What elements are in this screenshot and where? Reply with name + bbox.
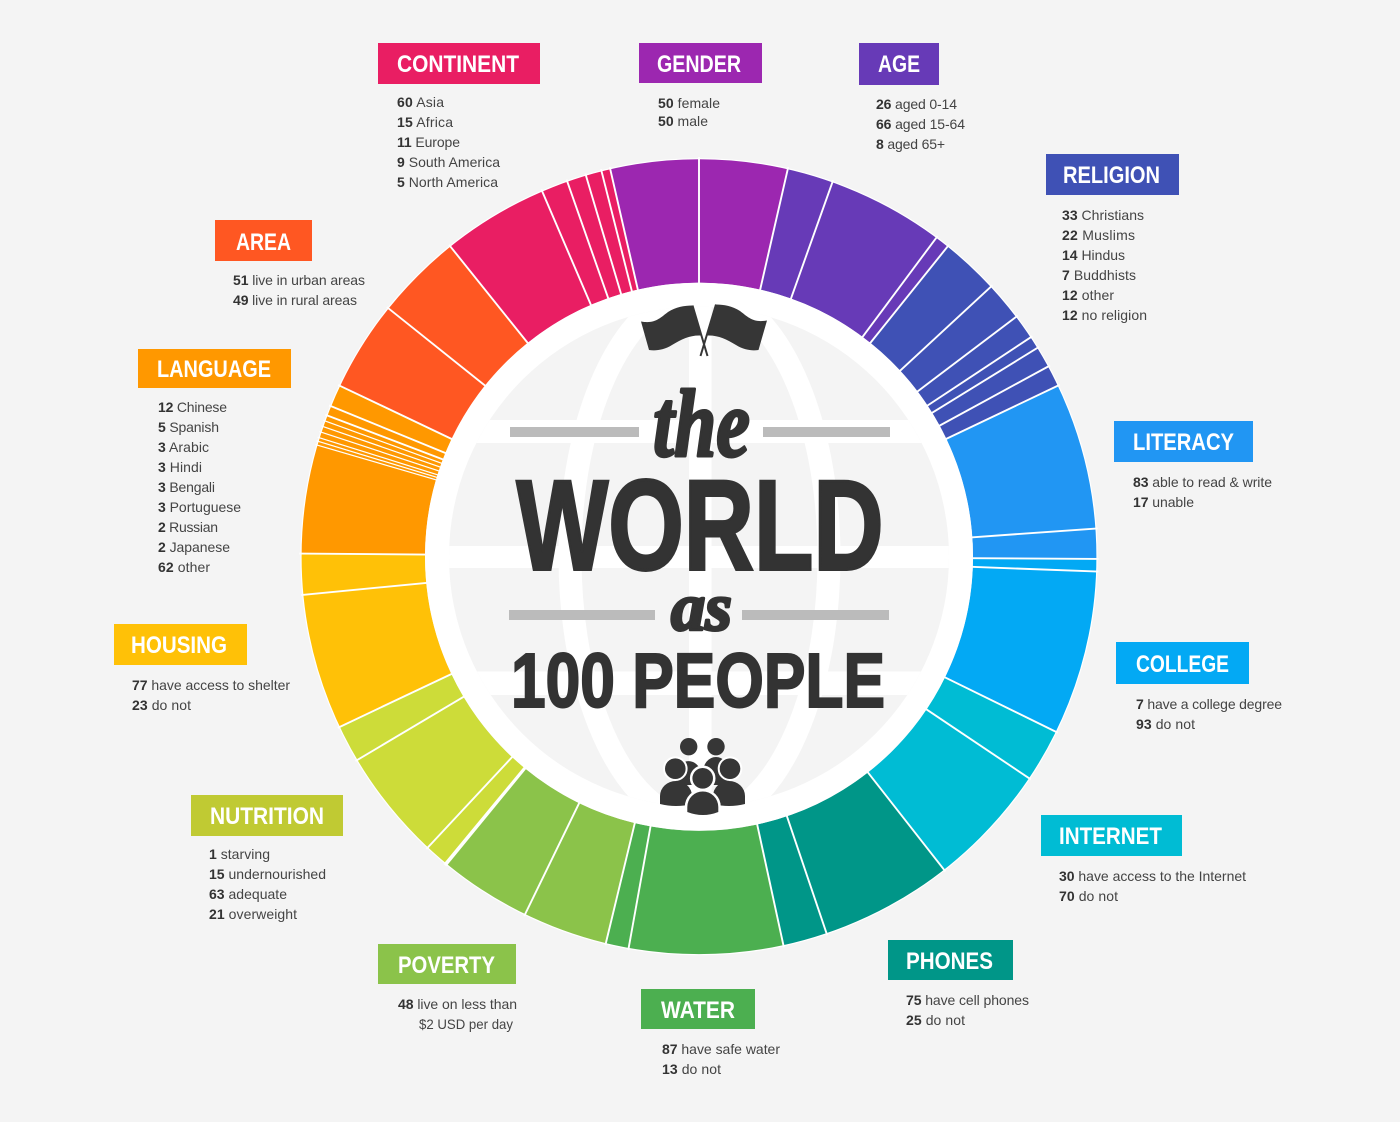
bar: right of as [742, 610, 889, 620]
list: language: 5 Spanish [158, 419, 219, 435]
list: language: 2 Russian [158, 519, 218, 535]
panel: college [1116, 642, 1282, 732]
list: religion: 14 Hindus [1062, 247, 1125, 263]
panel: gender [639, 43, 762, 129]
list: internet: 30 have access to the Internet [1059, 868, 1246, 884]
wedge: internet [868, 677, 1056, 870]
heading: water: WATER [661, 997, 735, 1024]
list: water [662, 1041, 780, 1077]
list: gender: 50 male [658, 113, 708, 129]
heading: area: AREA [236, 229, 291, 256]
wedge: continent [450, 169, 638, 343]
list: language: 3 Portuguese [158, 499, 241, 515]
list: poverty [398, 996, 517, 1032]
wedge: language [301, 386, 452, 555]
list: poverty: $2 USD per day [419, 1016, 513, 1032]
list: language: 3 Hindi [158, 459, 202, 475]
list: continent: 11 Europe [397, 134, 460, 150]
heading: phones: PHONES [906, 948, 993, 975]
panel: religion [1046, 154, 1179, 323]
bar: left of as [509, 610, 655, 620]
list: area [233, 272, 365, 308]
list: religion [1062, 207, 1147, 323]
panel: water [641, 989, 780, 1077]
wedge: age [760, 169, 948, 343]
heading: religion: RELIGION [1063, 162, 1160, 189]
panel: nutrition [191, 795, 343, 922]
list: nutrition: 21 overweight [209, 906, 297, 922]
list: nutrition [209, 846, 326, 922]
list: age: 26 aged 0-14 [876, 96, 957, 112]
list: area: 51 live in urban areas [233, 272, 365, 288]
list: housing: 77 have access to shelter [132, 677, 290, 693]
list: housing: 23 do not [132, 697, 191, 713]
heading: college [1116, 642, 1249, 684]
panel: age [859, 43, 965, 152]
panel: continent [378, 43, 540, 190]
heading: language: LANGUAGE [157, 356, 271, 383]
list: gender [658, 95, 720, 129]
panel: phones [888, 940, 1029, 1028]
list: nutrition: 1 starving [209, 846, 270, 862]
list: religion: 12 no religion [1062, 307, 1147, 323]
wedge: literacy [946, 385, 1097, 559]
heading: gender: GENDER [657, 51, 741, 78]
list: age [876, 96, 965, 152]
heading: internet: INTERNET [1059, 823, 1162, 850]
list: language: 2 Japanese [158, 539, 230, 555]
heading: language [138, 349, 291, 388]
heading: religion [1046, 154, 1179, 195]
list: internet: 70 do not [1059, 888, 1118, 904]
title word: as: as [671, 569, 732, 645]
wedge: gender [610, 159, 788, 290]
list: phones [906, 992, 1029, 1028]
heading: internet [1041, 815, 1182, 856]
heading: area [215, 220, 312, 261]
list: continent: 60 Asia [397, 94, 444, 110]
list: religion: 33 Christians [1062, 207, 1144, 223]
list: poverty: 48 live on less than [398, 996, 517, 1012]
panel: housing [114, 624, 290, 713]
list: continent: 9 South America [397, 154, 500, 170]
list: housing [132, 677, 290, 713]
list: phones: 25 do not [906, 1012, 965, 1028]
title [509, 304, 890, 815]
list: language: 12 Chinese [158, 399, 227, 415]
globe background [425, 283, 973, 831]
wedge: water [606, 823, 784, 955]
list: religion: 22 Muslims [1062, 227, 1135, 243]
list: phones: 75 have cell phones [906, 992, 1029, 1008]
list: literacy [1133, 474, 1272, 510]
title word: WORLD: WORLD [516, 454, 884, 598]
panel: internet [1041, 815, 1246, 904]
list: language: 3 Bengali [158, 479, 215, 495]
title words: 100 PEOPLE: 100 PEOPLE [511, 638, 885, 724]
list: continent: 5 North America [397, 174, 498, 190]
list: college [1136, 696, 1282, 732]
list: water: 13 do not [662, 1061, 721, 1077]
list: literacy: 83 able to read & write [1133, 474, 1272, 490]
panel: literacy [1114, 421, 1272, 510]
list: language: 3 Arabic [158, 439, 209, 455]
bar: left of the [510, 427, 639, 437]
heading: age: AGE [878, 51, 920, 78]
bar: right of the [763, 427, 890, 437]
title word: the: the [653, 370, 750, 477]
icon: crossed flags [641, 304, 767, 356]
list: nutrition: 15 undernourished [209, 866, 326, 882]
list: college: 7 have a college degree [1136, 696, 1282, 712]
panel: area [215, 220, 365, 308]
heading: continent: CONTINENT [397, 51, 519, 78]
heading: phones [888, 940, 1013, 980]
list: continent: 15 Africa [397, 114, 453, 130]
list: continent [397, 94, 500, 190]
heading: literacy [1114, 421, 1253, 462]
wedge: poverty [447, 769, 635, 944]
panel: poverty [378, 944, 517, 1032]
wedge: housing [301, 554, 451, 727]
heading: poverty: POVERTY [398, 952, 495, 979]
panel: language [138, 349, 291, 575]
icon: group of people [660, 738, 745, 815]
list: age: 8 aged 65+ [876, 136, 945, 152]
heading: housing [114, 624, 247, 665]
list: age: 66 aged 15-64 [876, 116, 965, 132]
list: religion: 12 other [1062, 287, 1114, 303]
heading: college: COLLEGE [1136, 651, 1229, 678]
wedge: nutrition [339, 674, 525, 864]
heading: literacy: LITERACY [1133, 429, 1234, 456]
wedge: religion [870, 246, 1058, 439]
heading: continent [378, 43, 540, 84]
wedge: college [945, 558, 1097, 732]
list: language: 62 other [158, 559, 210, 575]
heading: housing: HOUSING [131, 632, 227, 659]
list: literacy: 17 unable [1133, 494, 1194, 510]
list: area: 49 live in rural areas [233, 292, 357, 308]
list: nutrition: 63 adequate [209, 886, 287, 902]
donut chart: the world as 100 people [301, 159, 1097, 955]
list: water: 87 have safe water [662, 1041, 780, 1057]
wedge: area [340, 246, 528, 439]
list: religion: 7 Buddhists [1062, 267, 1136, 283]
list: language [158, 399, 241, 575]
heading: nutrition [191, 795, 343, 836]
list: internet [1059, 868, 1246, 904]
list: gender: 50 female [658, 95, 720, 111]
heading: nutrition: NUTRITION [210, 803, 324, 830]
wedge: phones [757, 772, 944, 946]
list: college: 93 do not [1136, 716, 1195, 732]
